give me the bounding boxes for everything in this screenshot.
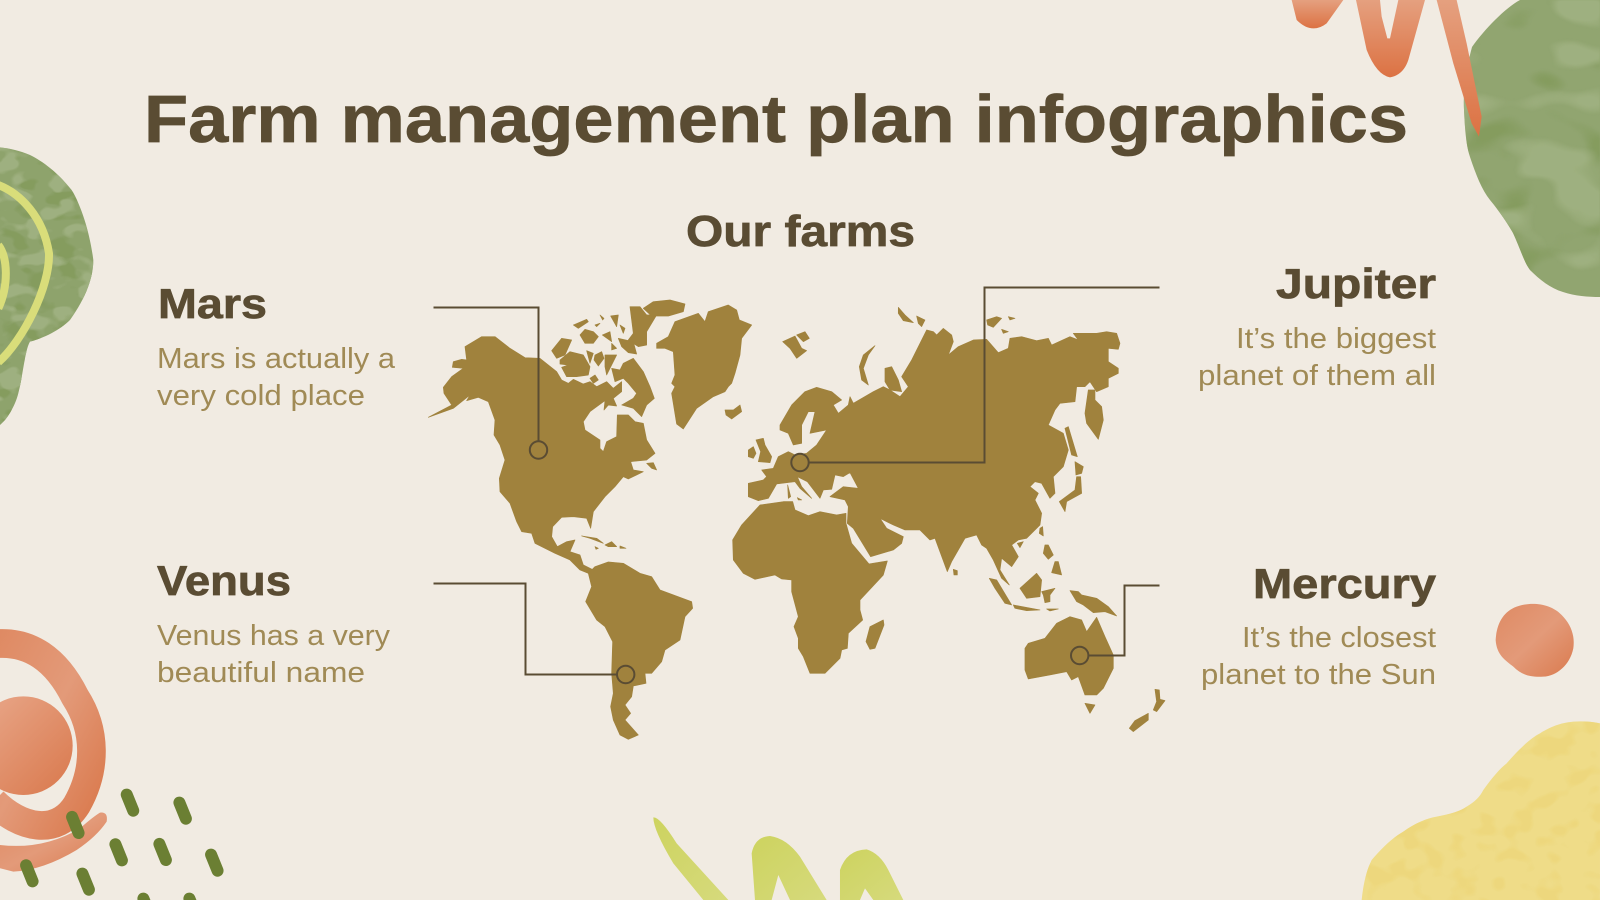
text block: Mercury: planet to the Sun: [1201, 659, 1436, 691]
callout line: Venus: [434, 584, 634, 683]
text block: Jupiter: planet of them all: [1198, 360, 1436, 392]
title: Farm management plan infographics: [144, 82, 1408, 157]
text block: Mercury: It’s the closest: [1242, 622, 1436, 654]
map: Eurasia, Africa, Oceania: [725, 307, 1165, 732]
text block: Mars: [157, 280, 396, 412]
text block: Venus: Venus: [157, 557, 291, 604]
subtitle: Our farms: [686, 207, 915, 256]
text block: Venus: beautiful name: [157, 657, 365, 689]
text block: Venus: [157, 557, 391, 689]
text block: Mercury: [1201, 560, 1437, 691]
decoration: yellow blob bottom right: [1362, 721, 1600, 900]
decoration: green blob left: [0, 147, 93, 425]
decoration: yellow-green scribble bottom: [653, 817, 903, 900]
decoration: orange scribble top: [1292, 0, 1482, 137]
map: Americas: [428, 300, 752, 739]
callout line: Jupiter: [791, 288, 1160, 471]
text block: Mars: very cold place: [157, 380, 365, 412]
decoration: orange spiral bottom left: [0, 643, 107, 872]
text block: Jupiter: [1198, 260, 1436, 392]
text block: Venus: Venus has a very: [157, 620, 391, 652]
decoration: orange dot right: [1496, 604, 1574, 677]
text block: Jupiter: Jupiter: [1276, 260, 1436, 307]
decoration: green blob top right: [1464, 0, 1600, 297]
text block: Mars: Mars: [158, 280, 267, 327]
callout line: Mars: [434, 308, 547, 459]
text block: Jupiter: It’s the biggest: [1236, 323, 1436, 355]
callout line: Mercury: [1071, 586, 1160, 664]
decoration: green dashes: [18, 787, 225, 900]
world map: [428, 300, 1165, 739]
text block: Mars: Mars is actually a: [157, 343, 396, 375]
text block: Mercury: Mercury: [1253, 560, 1437, 607]
